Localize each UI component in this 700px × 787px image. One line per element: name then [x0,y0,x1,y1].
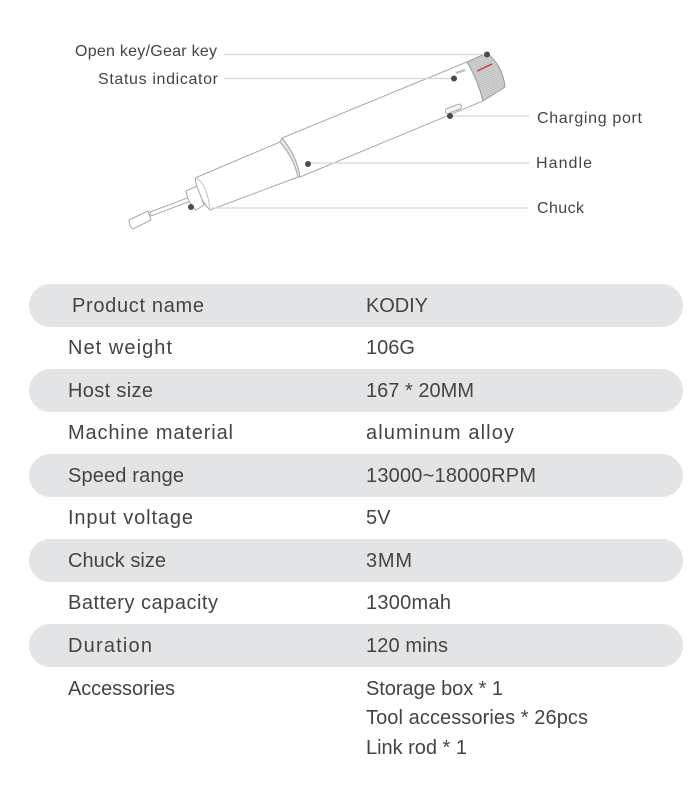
product diagram [75,43,643,229]
handle body [282,62,483,177]
row: accessories: Tool accessories * 26pcs [366,707,588,729]
label: chuck: Chuck [537,200,585,217]
row: host size [68,380,474,402]
row: accessories: Accessories [68,678,175,700]
ring [280,138,300,177]
row: accessories: Link rod * 1 [366,737,467,759]
row: speed range: Speed range [68,465,184,487]
row: duration [68,635,448,657]
row: chuck size: Chuck size [68,550,166,572]
row: duration: 120 mins [366,635,448,657]
charging port [445,103,462,114]
lower body [195,142,298,210]
row: input voltage [68,507,391,529]
bit shaft [150,197,191,216]
row: speed range: 13000~18000RPM [366,465,536,487]
row: net weight [68,337,415,359]
row: net weight: Net weight [68,337,172,359]
label: charging port: Charging port [537,110,643,127]
label: open key: Open key/Gear key [75,43,217,60]
row: host size: 167 * 20MM [366,380,474,402]
pen drawing [129,53,505,229]
row: chuck size: 3MM [366,550,412,572]
row: input voltage: 5V [366,507,391,529]
row: machine material [68,422,514,444]
striped rows [29,284,683,667]
bit tip [129,211,151,229]
collet [186,186,204,210]
row: duration: Duration [68,635,152,657]
row: product name: Product name [72,295,204,317]
label: handle: Handle [536,155,592,172]
row: machine material: Machine material [68,422,233,444]
row: net weight: 106G [366,337,415,359]
row: product name [72,295,428,317]
row: battery capacity: Battery capacity [68,592,218,614]
row: battery capacity: 1300mah [366,592,451,614]
row: accessories [68,678,588,759]
body end face [195,178,210,210]
row: battery capacity [68,592,451,614]
red mark [477,64,492,71]
leader lines [212,54,529,208]
status slot [456,70,465,73]
row: input voltage: Input voltage [68,507,193,529]
row: host size: Host size [68,380,153,402]
row: speed range [68,465,536,487]
specification table [29,284,683,759]
label: status indicator: Status indicator [98,71,219,88]
marker dots [188,52,490,210]
row: chuck size [68,550,412,572]
knurled cap [467,53,505,101]
row: accessories: Storage box * 1 [366,678,503,700]
row: machine material: aluminum alloy [366,422,514,444]
row: product name: KODIY [366,295,428,317]
